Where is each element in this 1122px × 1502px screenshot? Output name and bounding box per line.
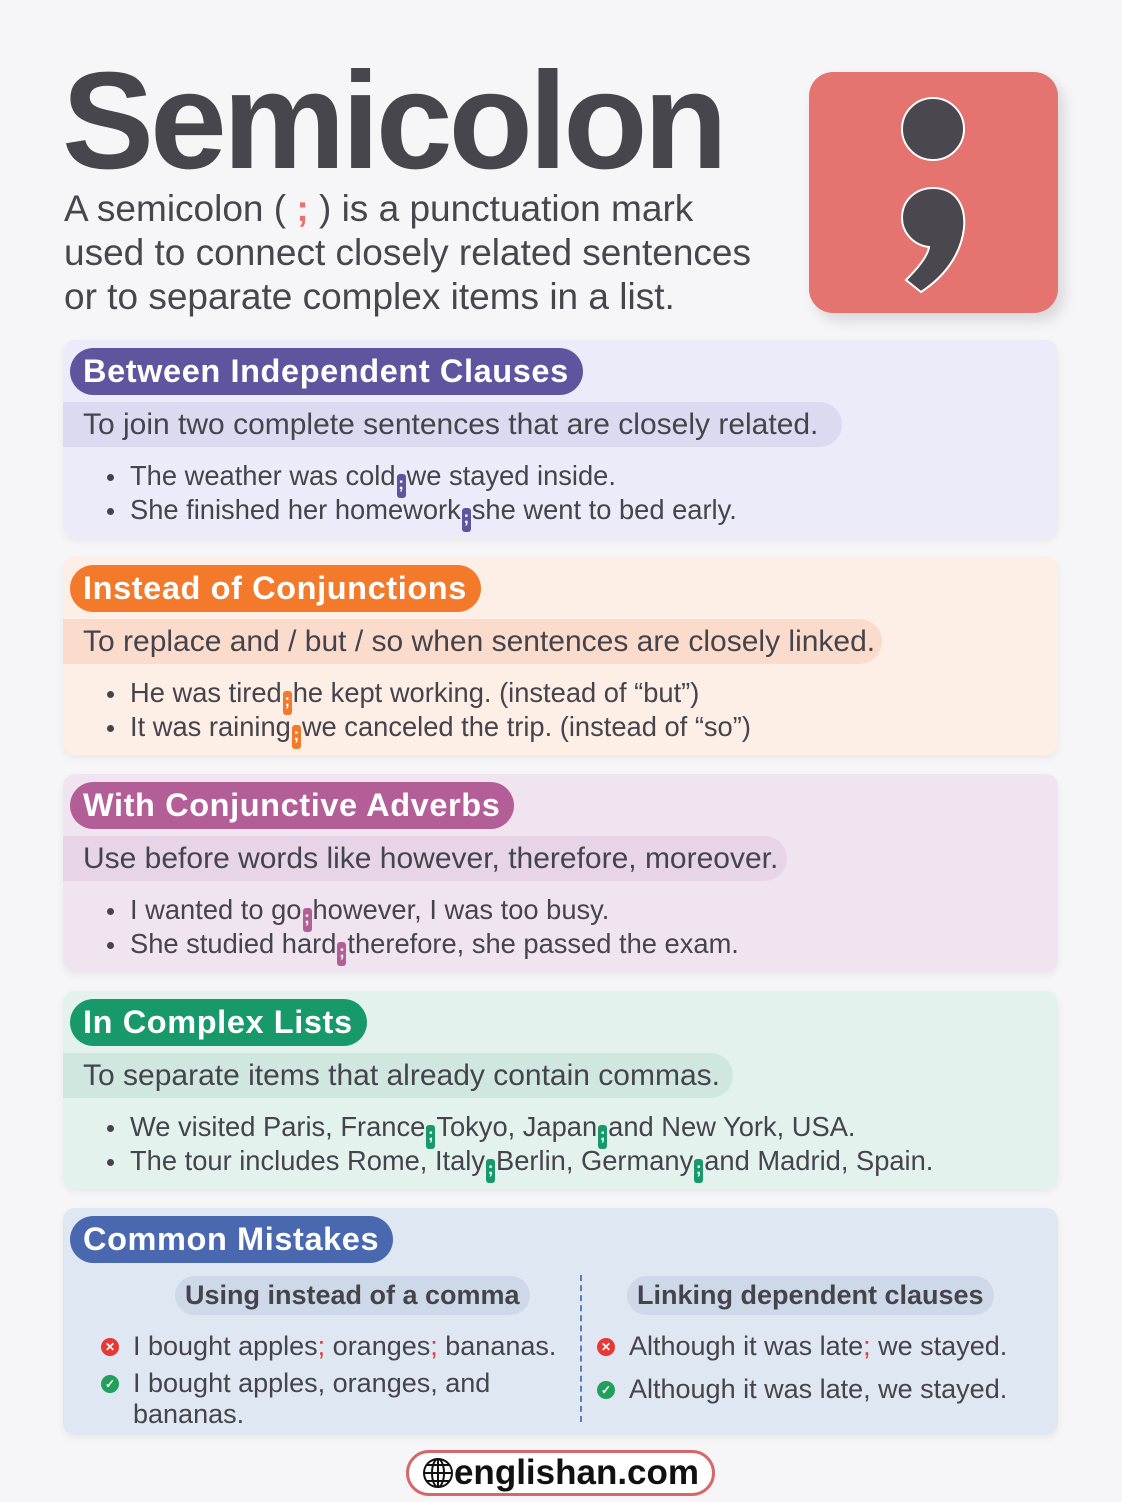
wrong example left: ✕ <box>105 1340 115 1354</box>
wrong example left: I bought apples; oranges; bananas. <box>133 1331 556 1361</box>
subheading: linking dependent clauses: Linking dependent clauses <box>637 1280 984 1310</box>
panel: between independent clauses <box>63 340 1058 538</box>
footer website badge <box>406 1450 715 1496</box>
examples: It was raining we canceled the trip. (instead of “so”) <box>130 711 751 742</box>
examples: ; <box>398 474 404 493</box>
heading pill <box>70 999 367 1046</box>
examples: ; <box>696 1159 702 1178</box>
heading pill: In Complex Lists <box>83 1004 353 1040</box>
examples: ; <box>463 508 469 527</box>
correct example left: ✓ <box>105 1377 115 1391</box>
panel: in complex lists <box>63 991 1058 1189</box>
panel: instead of conjunctions <box>63 557 1058 755</box>
subtitle definition <box>64 188 751 317</box>
usage band: To join two complete sentences that are closely related. <box>83 408 818 441</box>
subtitle definition: or to separate complex items in a list. <box>64 276 675 317</box>
usage band: Use before words like however, therefore, moreover. <box>83 842 778 875</box>
icon: semicolon box <box>809 72 1058 313</box>
subtitle definition: used to connect closely related sentences <box>64 232 751 273</box>
wrong example right: Although it was late; we stayed. <box>629 1331 1007 1361</box>
footer website badge: englishan.com <box>454 1453 699 1492</box>
panel: common mistakes <box>63 1208 1058 1435</box>
examples: ; <box>488 1159 493 1178</box>
examples: I wanted to go however, I was too busy. <box>130 894 609 925</box>
examples <box>107 677 751 749</box>
correct example left: I bought apples, oranges, and bananas. <box>133 1368 490 1429</box>
correct example right: Although it was late, we stayed. <box>629 1374 1007 1404</box>
examples: ; <box>293 725 299 744</box>
wrong example right: ✕ <box>601 1340 611 1354</box>
heading pill: With Conjunctive Adverbs <box>83 787 500 823</box>
examples: ; <box>339 942 345 961</box>
correct example right: ✓ <box>601 1383 611 1397</box>
examples <box>107 894 739 966</box>
examples <box>107 1111 933 1183</box>
examples: We visited Paris, France Tokyo, Japan and New York, USA. <box>130 1111 856 1142</box>
examples <box>107 460 737 532</box>
examples: She finished her homework she went to bed early. <box>130 494 737 525</box>
examples: The weather was cold we stayed inside. <box>130 460 616 491</box>
examples: ; <box>600 1125 606 1144</box>
usage band <box>63 1053 733 1098</box>
usage band <box>63 402 842 447</box>
examples: ; <box>304 908 310 927</box>
examples: ; <box>428 1125 434 1144</box>
usage band: To separate items that already contain commas. <box>83 1059 720 1092</box>
examples: He was tired he kept working. (instead of “but”) <box>130 677 699 708</box>
heading pill: Between Independent Clauses <box>83 353 569 389</box>
heading pill: Instead of Conjunctions <box>83 570 467 606</box>
subtitle definition: A semicolon ( ; ) is a punctuation mark <box>64 188 693 229</box>
examples: The tour includes Rome, Italy Berlin, Germany and Madrid, Spain. <box>130 1145 933 1176</box>
usage band: To replace and / but / so when sentences are closely linked. <box>83 625 875 658</box>
examples: She studied hard therefore, she passed the exam. <box>130 928 739 959</box>
panel: with conjunctive adverbs <box>63 774 1058 972</box>
subheading: using instead of a comma: Using instead of a comma <box>185 1280 520 1310</box>
examples: ; <box>284 691 290 710</box>
title: Semicolon <box>62 44 724 198</box>
heading pill: Common Mistakes <box>83 1221 379 1257</box>
